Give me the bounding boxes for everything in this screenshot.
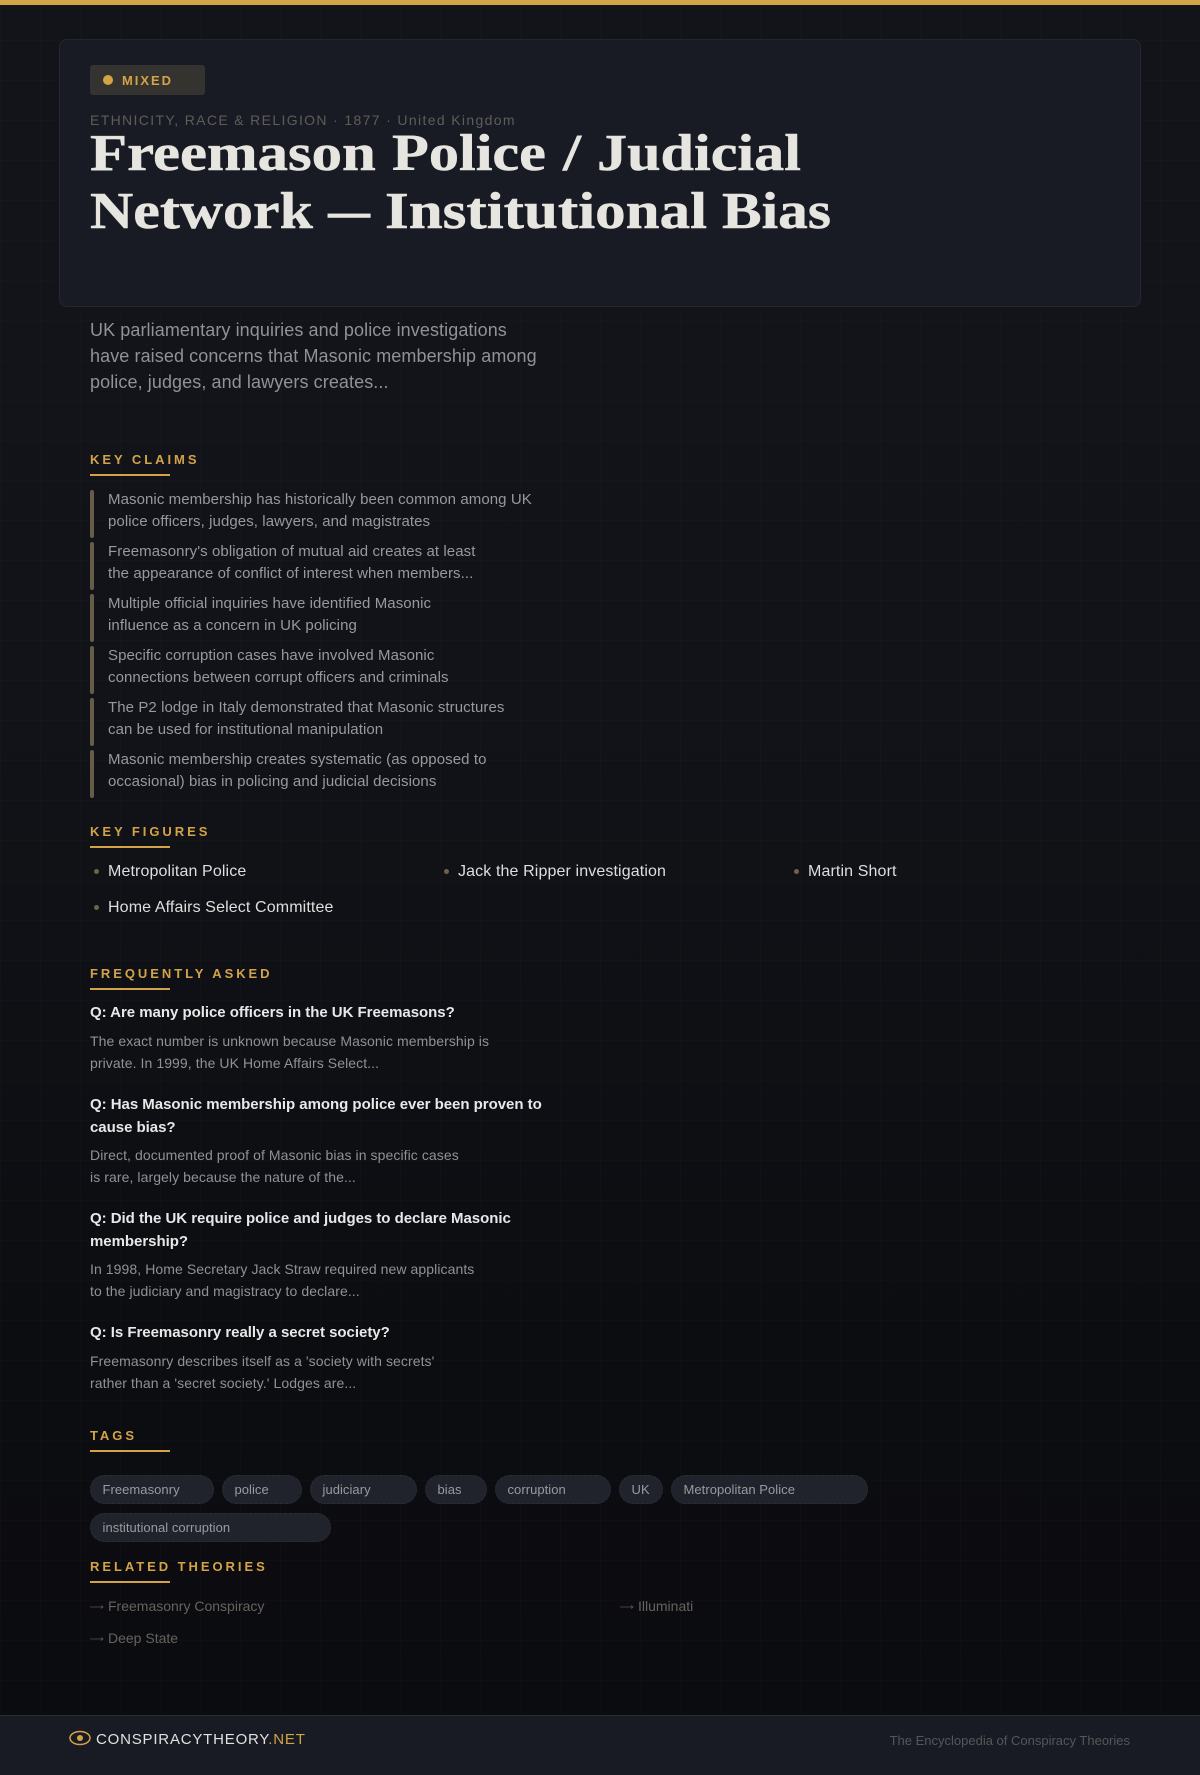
tag: judiciary: judiciary — [322, 1482, 371, 1497]
title: / — [563, 125, 581, 182]
claim 6: occasional) bias in policing and judicial decisions — [108, 773, 436, 790]
panel: header — [59, 39, 1141, 307]
claim 1: Masonic membership has historically been common among UK — [108, 491, 532, 508]
description — [90, 320, 537, 392]
faq 2 answer — [90, 1146, 459, 1185]
claim 3: influence as a concern in UK policing — [108, 617, 357, 634]
badge: mixed — [90, 65, 205, 95]
description: have raised concerns that Masonic membership among — [90, 346, 537, 366]
faq 2 question: Q: Has Masonic membership among police ever been proven to — [90, 1096, 542, 1113]
figure: Home Affairs Select Committee: Home Affairs Select Committee — [108, 899, 334, 916]
tag: Freemasonry — [90, 1475, 214, 1504]
related: Illuminati: Illuminati — [638, 1598, 693, 1614]
icon: status dot — [103, 75, 113, 85]
faq 3 question: Q: Did the UK require police and judges to declare Masonic — [90, 1210, 511, 1227]
related: Freemasonry Conspiracy: Freemasonry Conspiracy — [108, 1598, 264, 1614]
figure: Martin Short: Martin Short — [808, 863, 897, 880]
claim 5 — [90, 698, 505, 746]
tag: institutional corruption: institutional corruption — [102, 1520, 230, 1535]
top accent bar — [0, 0, 1200, 5]
description: police, judges, and lawyers creates... — [90, 372, 389, 392]
title: Freemason — [90, 125, 376, 182]
claim 6: Masonic membership creates systematic (as opposed to — [108, 751, 486, 768]
tag: corruption — [495, 1475, 610, 1504]
heading: frequently asked: FREQUENTLY ASKED — [90, 966, 273, 981]
faq 2 answer: Direct, documented proof of Masonic bias in specific cases — [90, 1146, 459, 1162]
claim 5: can be used for institutional manipulation — [108, 721, 383, 738]
faq 2 question: cause bias? — [90, 1119, 176, 1136]
claim 6 — [90, 750, 486, 798]
faq 3 answer: In 1998, Home Secretary Jack Straw required new applicants — [90, 1260, 474, 1276]
title: Police — [392, 125, 546, 182]
title: Institutional — [385, 183, 707, 240]
footer tagline: The Encyclopedia of Conspiracy Theories — [890, 1733, 1130, 1748]
tag: Metropolitan Police — [671, 1475, 868, 1504]
faq 3 answer — [90, 1260, 474, 1299]
faq 3 question — [90, 1210, 511, 1250]
tag: corruption: corruption — [508, 1482, 566, 1497]
logo wordmark: CONSPIRACYTHEORY.NET — [96, 1731, 306, 1748]
title: Network — [90, 183, 313, 240]
tag: bias: bias — [438, 1482, 462, 1497]
faq 4 question: Q: Is Freemasonry really a secret society? — [90, 1324, 390, 1341]
footer — [0, 1715, 1200, 1775]
heading: key claims: KEY CLAIMS — [90, 452, 199, 467]
faq 1 answer: private. In 1999, the UK Home Affairs Select... — [90, 1055, 379, 1071]
category line: ETHNICITY, RACE & RELIGION · 1877 · United Kingdom — [90, 112, 516, 128]
tag: UK — [619, 1475, 662, 1504]
heading: key figures: KEY FIGURES — [90, 824, 210, 839]
faq 4 answer: rather than a 'secret society.' Lodges are... — [90, 1375, 356, 1391]
title: Bias — [722, 183, 831, 240]
tag: police: police — [234, 1482, 269, 1497]
faq 1 answer — [90, 1032, 489, 1071]
faq 4 answer — [90, 1352, 434, 1391]
faq 1 answer: The exact number is unknown because Masonic membership is — [90, 1032, 489, 1048]
title — [90, 125, 831, 240]
faq 4 answer: Freemasonry describes itself as a 'society with secrets' — [90, 1352, 434, 1368]
faq 2 answer: is rare, largely because the nature of the... — [90, 1169, 356, 1185]
title: — — [328, 183, 370, 240]
tag: police — [222, 1475, 302, 1504]
claim 3: Multiple official inquiries have identified Masonic — [108, 595, 431, 612]
claim 3 — [90, 594, 431, 642]
claim 4 — [90, 646, 449, 694]
related: Deep State: Deep State — [108, 1630, 178, 1646]
claim 1: police officers, judges, lawyers, and magistrates — [108, 513, 430, 530]
figure: Metropolitan Police: Metropolitan Police — [108, 863, 246, 880]
figure: Jack the Ripper investigation: Jack the Ripper investigation — [458, 863, 666, 880]
icon: eye logo — [69, 1730, 91, 1746]
faq 1 question: Q: Are many police officers in the UK Freemasons? — [90, 1004, 455, 1021]
heading: related theories: RELATED THEORIES — [90, 1559, 268, 1574]
claim 2 — [90, 542, 476, 590]
description: UK parliamentary inquiries and police investigations — [90, 320, 507, 340]
tag: Freemasonry: Freemasonry — [102, 1482, 180, 1497]
tag: UK: UK — [632, 1482, 650, 1497]
tag: bias — [425, 1475, 487, 1504]
claim 5: The P2 lodge in Italy demonstrated that Masonic structures — [108, 699, 505, 716]
claim 2: the appearance of conflict of interest when members... — [108, 565, 473, 582]
claim 1 — [90, 490, 532, 538]
title: Judicial — [597, 125, 801, 182]
heading: tags: TAGS — [90, 1428, 137, 1443]
tag: judiciary — [310, 1475, 417, 1504]
faq 2 question — [90, 1096, 542, 1136]
tag: Metropolitan Police: Metropolitan Police — [684, 1482, 795, 1497]
claim 4: connections between corrupt officers and criminals — [108, 669, 449, 686]
claim 4: Specific corruption cases have involved Masonic — [108, 647, 434, 664]
faq 3 question: membership? — [90, 1233, 188, 1250]
claims list — [90, 490, 532, 798]
tag: institutional corruption — [90, 1513, 331, 1542]
claim 2: Freemasonry's obligation of mutual aid creates at least — [108, 543, 475, 560]
badge label: MIXED — [122, 73, 173, 88]
faq 3 answer: to the judiciary and magistracy to declare... — [90, 1283, 360, 1299]
